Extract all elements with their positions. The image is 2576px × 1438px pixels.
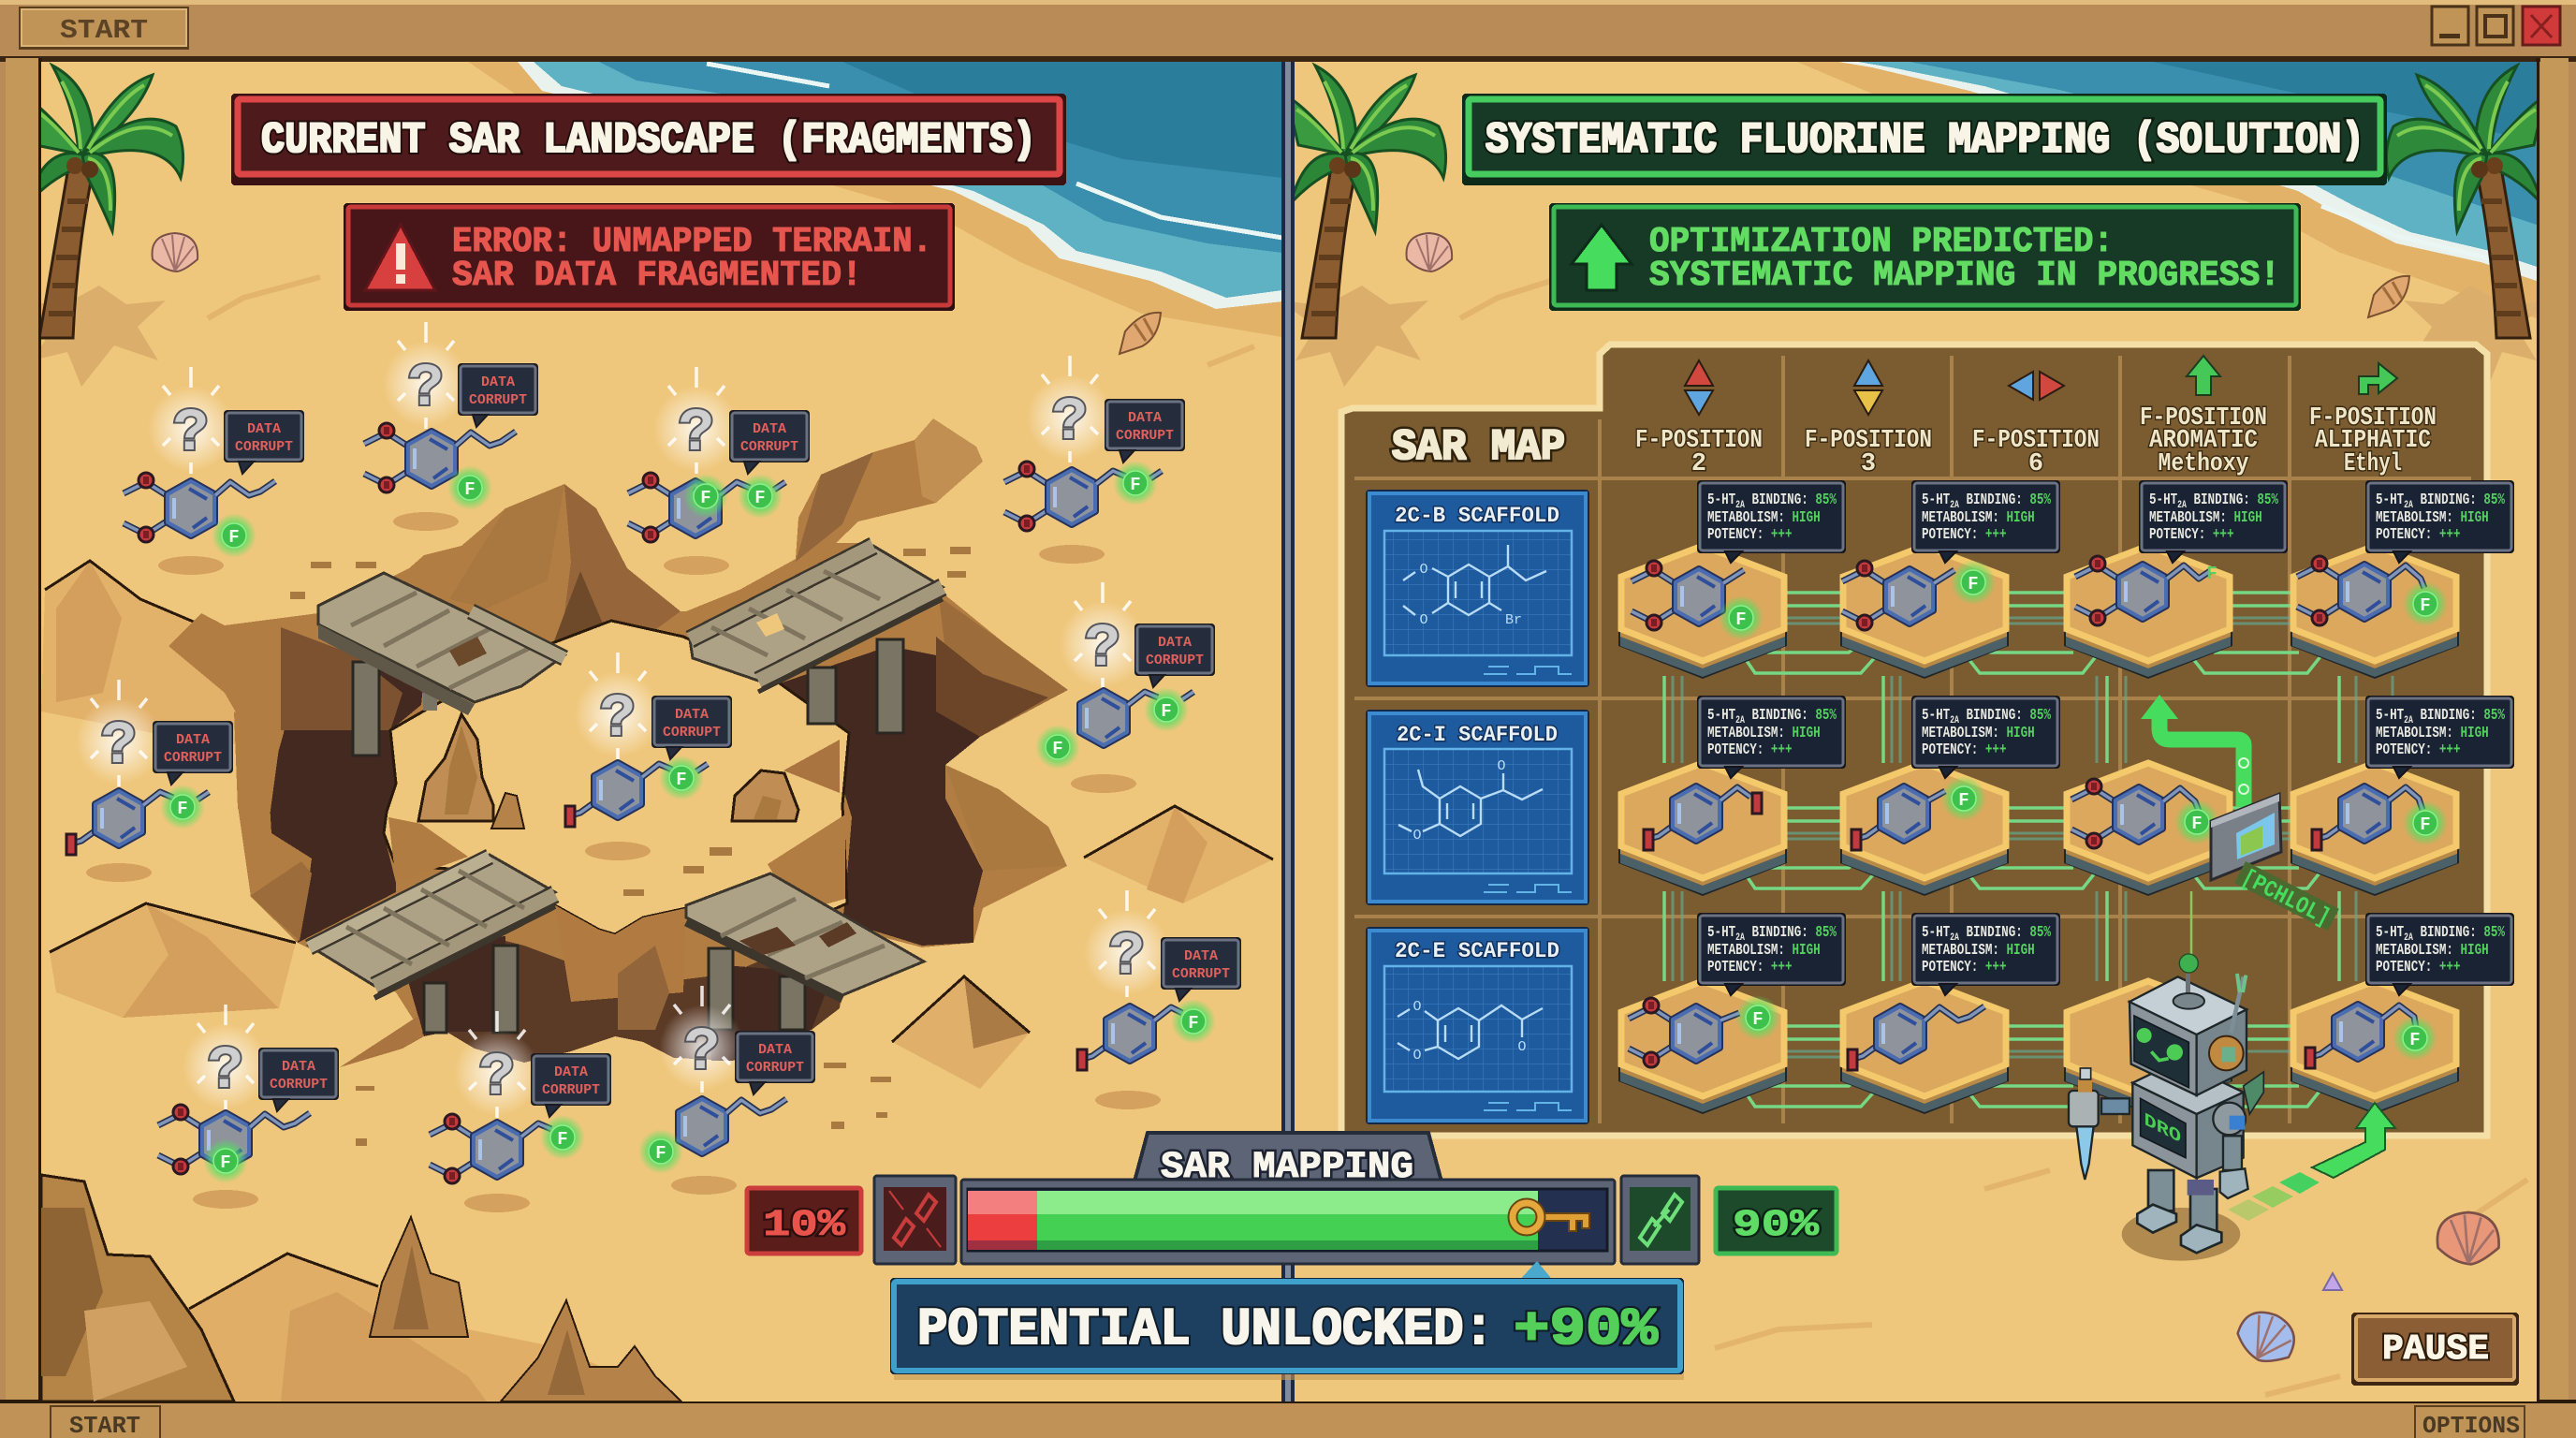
column header: F-position aliphatic ethyl: ALIPHATIC xyxy=(2315,427,2431,455)
tooltips row 3: METABOLISM: HIGH xyxy=(1707,942,1821,960)
corrupted fragment 6: ? xyxy=(600,686,636,754)
shell blue xyxy=(2231,1303,2303,1372)
tooltips row 3: 5-HT xyxy=(2376,924,2404,942)
icon: up arrow xyxy=(1572,225,1632,290)
90 percent box: 90% xyxy=(1733,1205,1820,1247)
tooltips row 1: POTENCY: +++ xyxy=(2376,526,2461,544)
window controls xyxy=(2432,7,2560,45)
corrupted fragment 2: CORRUPT xyxy=(469,392,527,408)
corrupted fragment 9: ? xyxy=(479,1045,515,1112)
corrupted fragment 11: ? xyxy=(1109,924,1145,991)
sea left xyxy=(468,62,1282,337)
tooltips row 3: 2A xyxy=(1950,932,1959,943)
hex tiles with molecules: row 2: F xyxy=(1958,790,1969,811)
tooltips row 3: 5-HT xyxy=(1922,924,1950,942)
SAR map heading: SAR MAP xyxy=(1392,423,1565,472)
corrupted fragment 1: F xyxy=(228,527,240,548)
corrupted fragment 6: CORRUPT xyxy=(663,725,721,741)
tooltips row 3: POTENCY: +++ xyxy=(1707,959,1793,976)
shadows under molecules xyxy=(86,512,1161,1212)
column header: F-position 3: F-POSITION xyxy=(1805,427,1932,455)
tooltips row 2: 85% xyxy=(1815,707,1837,725)
dunes xyxy=(50,903,296,1018)
shell xyxy=(1406,233,1452,271)
tooltips row 3: 85% xyxy=(2029,924,2051,942)
debris xyxy=(290,547,971,1146)
scaffold card 2C-B: O xyxy=(1419,562,1428,578)
corrupted fragment 4: ? xyxy=(1052,389,1088,457)
icon: broken link xyxy=(874,1176,956,1264)
corrupted fragment 5: F xyxy=(1052,739,1063,759)
callout: potential unlocked: POTENTIAL UNLOCKED: xyxy=(917,1299,1494,1359)
palm left xyxy=(41,62,185,387)
sand wisps xyxy=(1460,281,2527,1395)
tooltips row 2: 5-HT xyxy=(1922,707,1950,725)
tooltips row 1: BINDING: xyxy=(1959,492,2029,509)
conch shell xyxy=(2368,276,2409,317)
tooltips row 2: 5-HT xyxy=(2376,707,2404,725)
hex tiles with molecules: row 1 xyxy=(1618,543,2459,679)
tooltips row 2: POTENCY: +++ xyxy=(1922,741,2007,759)
10 percent box: 10% xyxy=(763,1205,846,1247)
corrupted fragment 4: CORRUPT xyxy=(1116,428,1174,444)
callout: optimization predicted: OPTIMIZATION PREDICTED: xyxy=(1649,222,2114,262)
panel: current SAR landscape xyxy=(16,62,1282,1401)
corrupted fragment 5 xyxy=(1035,582,1215,770)
scaffold card 2C-B xyxy=(1366,490,1589,687)
scaffold card 2C-B: O xyxy=(1419,612,1428,628)
callout: error xyxy=(344,203,955,311)
corrupted fragment 3: DATA xyxy=(753,421,786,437)
heading: current SAR landscape xyxy=(231,94,1066,185)
hex tiles with molecules: row 1: F xyxy=(2420,595,2431,616)
callout: optimization predicted xyxy=(1549,203,2301,311)
scaffold card 2C-E: 2C-E SCAFFOLD xyxy=(1395,939,1559,963)
corrupted fragment 11 xyxy=(1077,890,1241,1070)
corrupted fragment 8: F xyxy=(220,1152,231,1173)
corrupted fragment 8 xyxy=(158,1005,339,1183)
centre divider xyxy=(1281,62,1295,1401)
column header: F-position aliphatic ethyl: F-POSITION xyxy=(2309,404,2437,433)
hex tiles with molecules: row 1: F xyxy=(1735,609,1747,630)
corrupted fragment 1: ? xyxy=(173,401,209,468)
SAR map board xyxy=(1341,345,2514,1136)
corrupted fragment 6: DATA xyxy=(675,707,709,723)
corrupted fragment 7: ? xyxy=(101,713,137,781)
tooltips row 1: BINDING: xyxy=(2187,492,2257,509)
corrupted fragment 9 xyxy=(430,1011,611,1183)
column header: F-position aromatic methoxy: F-POSITION xyxy=(2140,404,2267,433)
column header: F-position 3 xyxy=(1805,360,1932,478)
hex tiles with molecules: row 3: F xyxy=(1752,1009,1764,1030)
corrupted fragment 3 xyxy=(628,367,810,542)
10 percent box xyxy=(747,1188,861,1254)
scaffold card 2C-I: O xyxy=(1497,758,1506,774)
bridge TL xyxy=(318,573,564,702)
central plateau xyxy=(384,621,849,934)
tooltips row 2: 85% xyxy=(2029,707,2051,725)
tooltips row 2: METABOLISM: HIGH xyxy=(1707,725,1821,742)
column header: F-position 6: F-POSITION xyxy=(1972,427,2100,455)
start button top: START xyxy=(60,15,148,46)
robot head xyxy=(2130,976,2247,1095)
corrupted fragment 5: ? xyxy=(1085,616,1120,683)
palm left of panel xyxy=(1279,66,1446,387)
corrupted fragment 5: F xyxy=(1161,701,1172,722)
tooltips row 1: BINDING: xyxy=(1745,492,1815,509)
callout: error: SAR DATA FRAGMENTED! xyxy=(452,256,862,296)
tooltips row 2: 2A xyxy=(2404,714,2413,726)
hex tiles with molecules: row 2: F xyxy=(2420,814,2431,835)
shell pink xyxy=(2437,1212,2499,1264)
heading: systematic fluorine mapping xyxy=(1462,94,2387,185)
corrupted fragment 8: ? xyxy=(208,1038,243,1106)
robot pipette arm xyxy=(2101,1098,2130,1114)
corrupted fragment 4: DATA xyxy=(1128,410,1162,426)
bridge BR xyxy=(686,873,924,995)
callout: optimization predicted: SYSTEMATIC MAPPING IN PROGRESS! xyxy=(1649,256,2280,296)
tooltips row 3: POTENCY: +++ xyxy=(1922,959,2007,976)
column header: F-position 3: 3 xyxy=(1861,450,1876,478)
tooltips row 1: METABOLISM: HIGH xyxy=(1922,509,2035,527)
tooltips row 3: BINDING: xyxy=(2413,924,2483,942)
corrupted fragment 7: F xyxy=(177,799,188,819)
hex tiles with molecules: row 2 xyxy=(1618,760,2459,896)
tooltips row 2: 5-HT xyxy=(1707,707,1735,725)
tooltips row 2: METABOLISM: HIGH xyxy=(2376,725,2489,742)
robot right arm xyxy=(2223,1136,2242,1170)
column header: F-position 6 xyxy=(1972,372,2100,478)
scaffold card 2C-E: O xyxy=(1412,999,1422,1015)
corrupted fragment 7: DATA xyxy=(176,732,210,748)
arrow: lower path with fading steps xyxy=(2228,1103,2395,1221)
arrow: optimization path up xyxy=(2141,695,2248,807)
corrupted fragment 6 xyxy=(565,653,732,827)
panel: systematic fluorine mapping xyxy=(1279,62,2554,1401)
tooltips row 2: POTENCY: +++ xyxy=(2376,741,2461,759)
icon: golden key xyxy=(1513,1203,1589,1231)
tooltips row 3: 2A xyxy=(1735,932,1745,943)
tooltips row 3: METABOLISM: HIGH xyxy=(1922,942,2035,960)
device with label: [PCHLOL] xyxy=(2237,864,2334,932)
corrupted fragment 10: ? xyxy=(684,1020,720,1087)
gem purple xyxy=(2323,1273,2342,1290)
tooltips row 1: 5-HT xyxy=(2376,492,2404,509)
pillars xyxy=(353,662,379,756)
tooltips row 1: BINDING: xyxy=(2413,492,2483,509)
corrupted fragment 2: ? xyxy=(408,356,444,423)
corrupted fragment 3: F xyxy=(700,488,711,508)
tooltips row 1: METABOLISM: HIGH xyxy=(1707,509,1821,527)
tooltips row 3: 85% xyxy=(2483,924,2505,942)
tooltips row 1: METABOLISM: HIGH xyxy=(2149,509,2262,527)
shell xyxy=(152,233,198,271)
circuit connections xyxy=(1664,593,2393,1107)
callout: potential unlocked xyxy=(890,1261,1684,1380)
corrupted fragment 11: F xyxy=(1188,1013,1199,1034)
tooltips row 1: 2A xyxy=(2404,499,2413,510)
callout: potential unlocked: +90% xyxy=(1514,1299,1658,1359)
corrupted fragment 10: DATA xyxy=(758,1042,792,1058)
hex tiles with molecules: row 3: F xyxy=(2409,1030,2421,1050)
tooltips row 2: METABOLISM: HIGH xyxy=(1922,725,2035,742)
hex tiles with molecules: row 1: F xyxy=(2206,564,2217,584)
tooltips row 3: BINDING: xyxy=(1959,924,2029,942)
column header: F-position aromatic methoxy xyxy=(2140,356,2267,478)
corrupted fragment 9: F xyxy=(557,1129,568,1150)
right chasm dark xyxy=(780,646,983,946)
tooltips row 2: BINDING: xyxy=(1745,707,1815,725)
tooltips row 2 xyxy=(1697,696,2514,778)
column header: F-position aliphatic ethyl xyxy=(2309,363,2437,478)
icon: intact link xyxy=(1621,1176,1699,1264)
column header: F-position 2: 2 xyxy=(1691,450,1706,478)
corrupted fragment 9: CORRUPT xyxy=(542,1082,600,1098)
tab: SAR mapping: SAR MAPPING xyxy=(1161,1147,1413,1189)
palm right of panel xyxy=(2387,62,2537,380)
tooltips row 1: 5-HT xyxy=(1922,492,1950,509)
corrupted fragment 1: DATA xyxy=(247,421,281,437)
tooltips row 1: 5-HT xyxy=(1707,492,1735,509)
corrupted fragment 11: DATA xyxy=(1184,948,1218,964)
scaffold card 2C-E: O xyxy=(1517,1039,1527,1055)
tooltips row 1: 2A xyxy=(1950,499,1959,510)
corrupted fragment 9: DATA xyxy=(554,1064,588,1080)
tooltips row 3: BINDING: xyxy=(1745,924,1815,942)
progress bar xyxy=(961,1180,1615,1264)
corrupted fragment 8: DATA xyxy=(282,1059,315,1075)
scaffold card 2C-I: O xyxy=(1412,828,1422,844)
tooltips row 3: POTENCY: +++ xyxy=(2376,959,2461,976)
tooltips row 2: 85% xyxy=(2483,707,2505,725)
corrupted fragment 2 xyxy=(364,322,538,510)
canyon terrain xyxy=(41,418,1273,1401)
scaffold card 2C-B: Br xyxy=(1505,612,1522,628)
corrupted fragment 5: DATA xyxy=(1158,635,1192,651)
column header: F-position 6: 6 xyxy=(2028,450,2043,478)
tooltips row 1: METABOLISM: HIGH xyxy=(2376,509,2489,527)
hex tiles with molecules: row 3 xyxy=(1618,978,2459,1114)
grid lines xyxy=(1354,356,2471,1123)
tooltips row 1: 85% xyxy=(2029,492,2051,509)
corrupted fragment 3: CORRUPT xyxy=(740,439,798,455)
corrupted fragment 10: CORRUPT xyxy=(746,1060,804,1076)
corrupted fragment 4: F xyxy=(1130,475,1141,495)
tooltips row 1: 2A xyxy=(1735,499,1745,510)
sea right xyxy=(1797,62,2537,318)
corrupted fragment 7 xyxy=(66,680,233,855)
tooltips row 2: POTENCY: +++ xyxy=(1707,741,1793,759)
conch shell xyxy=(1120,313,1161,354)
corrupted fragment 6: F xyxy=(676,770,687,790)
corrupted fragment 3: ? xyxy=(679,401,714,468)
corrupted fragment 5: CORRUPT xyxy=(1146,653,1204,668)
tooltips row 1 xyxy=(1697,480,2514,563)
corrupted fragment 1: CORRUPT xyxy=(235,439,293,455)
tooltips row 3: 5-HT xyxy=(1707,924,1735,942)
tab: SAR mapping xyxy=(1134,1133,1442,1189)
scaffold card 2C-I: 2C-I SCAFFOLD xyxy=(1397,723,1558,747)
corrupted fragment 3: F xyxy=(754,488,766,508)
scaffold card 2C-B: 2C-B SCAFFOLD xyxy=(1395,504,1559,528)
scaffold card 2C-I xyxy=(1366,710,1589,905)
tooltips row 3: 85% xyxy=(1815,924,1837,942)
tooltips row 3: 2A xyxy=(2404,932,2413,943)
tooltips row 3: METABOLISM: HIGH xyxy=(2376,942,2489,960)
corrupted fragment 7: CORRUPT xyxy=(164,750,222,766)
tooltips row 1: 2A xyxy=(2177,499,2187,510)
pause button xyxy=(2351,1313,2519,1386)
start label bottom xyxy=(51,1406,160,1438)
hex tiles with molecules: row 2: F xyxy=(2191,814,2203,834)
tooltips row 1: 85% xyxy=(2257,492,2278,509)
corrupted fragment 8: CORRUPT xyxy=(270,1077,328,1093)
bottom-left rocks xyxy=(189,1255,599,1401)
column header: F-position aliphatic ethyl: Ethyl xyxy=(2344,450,2402,478)
scaffold card 2C-E: O xyxy=(1412,1048,1422,1064)
progress gauge xyxy=(747,1133,1837,1264)
rocks xyxy=(418,714,493,821)
tooltips row 1: POTENCY: +++ xyxy=(2149,526,2234,544)
tooltips row 2: BINDING: xyxy=(2413,707,2483,725)
column header: F-position aromatic methoxy: Methoxy xyxy=(2159,450,2248,478)
tooltips row 2: 2A xyxy=(1950,714,1959,726)
corrupted fragment 10 xyxy=(638,986,815,1174)
corrupted fragment 4 xyxy=(1004,356,1185,531)
icon: warning triangle xyxy=(365,225,435,290)
heading: systematic fluorine mapping: SYSTEMATIC FLUORINE MAPPING (SOLUTION) xyxy=(1486,116,2364,165)
bridge TR xyxy=(690,546,943,681)
column header: F-position 2 xyxy=(1635,360,1763,478)
tooltips row 1: POTENCY: +++ xyxy=(1922,526,2007,544)
start button top xyxy=(19,7,189,50)
sand wisps xyxy=(206,274,1255,367)
corrupted fragment 2: DATA xyxy=(481,374,515,390)
robot xyxy=(2069,954,2263,1261)
corrupted fragment 1 xyxy=(124,367,304,558)
tooltips row 1: 5-HT xyxy=(2149,492,2177,509)
corrupted fragment 11: CORRUPT xyxy=(1172,966,1230,982)
robot body xyxy=(2132,1061,2244,1178)
tooltips row 2: 2A xyxy=(1735,714,1745,726)
tooltips row 1: 85% xyxy=(1815,492,1837,509)
heading: current SAR landscape: CURRENT SAR LANDSCAPE (FRAGMENTS) xyxy=(261,116,1036,165)
callout: error: ERROR: UNMAPPED TERRAIN. xyxy=(452,222,932,262)
left chasm dark xyxy=(269,655,424,943)
robot: DRO xyxy=(2144,1110,2181,1149)
corrupted fragment 10: F xyxy=(655,1143,666,1164)
device with label xyxy=(2211,794,2339,934)
pause button: PAUSE xyxy=(2382,1329,2489,1370)
tooltips row 3 xyxy=(1697,913,2514,995)
tooltips row 1: POTENCY: +++ xyxy=(1707,526,1793,544)
column header: F-position 2: F-POSITION xyxy=(1635,427,1763,455)
tooltips row 1: 85% xyxy=(2483,492,2505,509)
corrupted fragment 2: F xyxy=(464,479,476,500)
90 percent box xyxy=(1716,1188,1837,1254)
hex tiles with molecules: row 1: F xyxy=(1968,574,1979,594)
bridge BL xyxy=(309,855,555,986)
pit under bridges xyxy=(424,936,842,1063)
column header: F-position aromatic methoxy: AROMATIC xyxy=(2149,427,2258,455)
tooltips row 2: BINDING: xyxy=(1959,707,2029,725)
scaffold card 2C-E xyxy=(1366,927,1589,1124)
